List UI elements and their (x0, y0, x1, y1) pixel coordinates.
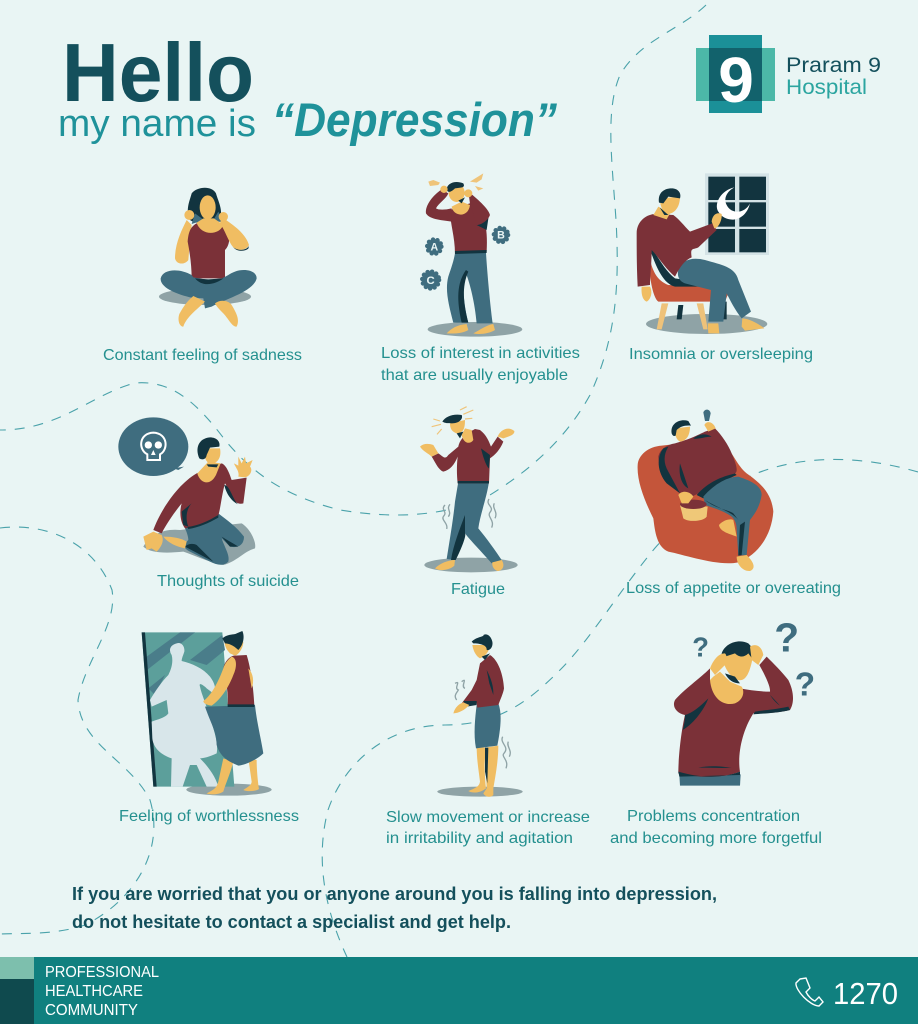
title: “Depression” (272, 93, 557, 146)
figure: man confused with question marks: ? (795, 667, 815, 704)
footer bar: 1270 (833, 976, 898, 1011)
title: Hello (62, 26, 254, 119)
figure: woman at mirror with large reflection (142, 631, 272, 796)
figure: woman sitting sad (159, 188, 257, 327)
logo: Praram 9 Hospital: Hospital (786, 76, 867, 99)
label (386, 809, 590, 847)
figure: woman with slow movement (437, 634, 523, 797)
label: Thoughts of suicide (157, 573, 299, 590)
logo: Praram 9 Hospital (696, 35, 881, 116)
call to action text: do not hesitate to contact a specialist and get help. (72, 912, 511, 932)
label: Loss of appetite or overeating (626, 580, 841, 597)
label: in irritability and agitation (386, 830, 573, 847)
footer bar (0, 957, 918, 1024)
label: Feeling of worthlessness (119, 808, 299, 825)
figure: man with fatigue (420, 407, 518, 572)
label: Slow movement or increase (386, 809, 590, 826)
label (610, 808, 822, 847)
label: Constant feeling of sadness (103, 347, 302, 364)
figure: man confused with letters: C (427, 275, 435, 287)
call to action text: If you are worried that you or anyone around you is falling into depression, (72, 884, 717, 904)
label (381, 345, 580, 384)
title (58, 26, 557, 146)
label: Loss of interest in activities (381, 345, 580, 362)
label: Insomnia or oversleeping (629, 346, 813, 363)
figure: man confused with letters (422, 173, 522, 337)
logo: Praram 9 Hospital: 9 (718, 44, 754, 116)
figure: man confused with letters: A (430, 241, 438, 253)
label: Problems concentration (627, 808, 800, 825)
figure: man confused with question marks: ? (692, 632, 709, 663)
call to action text (72, 884, 717, 932)
figure: man confused with question marks (674, 615, 815, 786)
label: Fatigue (451, 581, 505, 598)
figure: man awake at night window (637, 173, 769, 334)
label: and becoming more forgetful (610, 830, 822, 847)
footer bar: PROFESSIONAL (45, 964, 159, 981)
figure: man overeating on bean bag (638, 410, 773, 571)
figure: man kneeling with skull bubble (118, 417, 255, 565)
figure: man confused with letters: B (497, 230, 505, 242)
footer bar: HEALTHCARE (45, 983, 143, 1000)
figure: man confused with question marks: ? (774, 615, 799, 661)
logo: Praram 9 Hospital: Praram 9 (786, 54, 881, 77)
title: my name is (58, 103, 256, 145)
footer bar: COMMUNITY (45, 1002, 138, 1019)
label: that are usually enjoyable (381, 367, 568, 384)
